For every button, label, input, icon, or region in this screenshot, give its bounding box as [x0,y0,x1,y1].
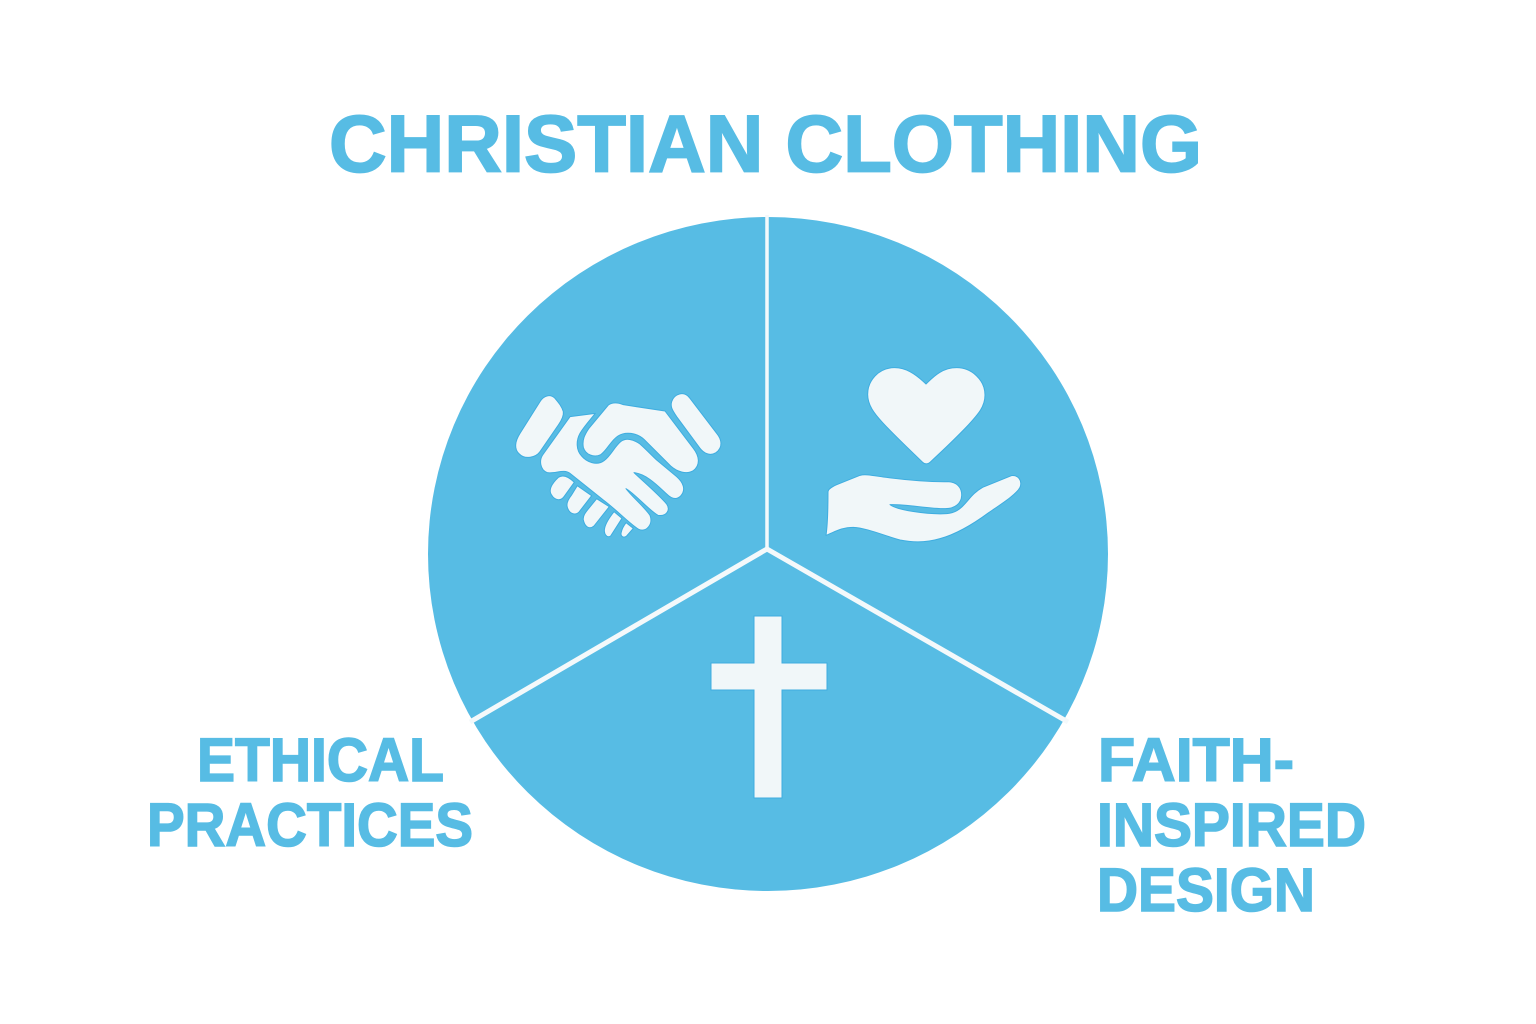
finger 2 [567,486,592,514]
finger 1 [550,476,574,500]
line: INSPIRED: INSPIRED [1097,791,1366,859]
divider: lower right [767,549,1068,722]
pie circle [428,217,1108,891]
right hand [583,403,698,473]
heart [868,368,985,464]
finger 4 [604,512,622,537]
finger 3 [583,499,609,528]
right cuff [671,394,721,454]
icon: heart in open hand [826,368,1021,542]
left cuff [516,396,563,457]
divider: vertical [765,215,769,549]
open hand [826,475,1021,542]
label: faith-inspired design [1097,726,1366,924]
label: ethical practices [147,726,473,859]
title: CHRISTIAN CLOTHING [329,100,1202,190]
divider: lower left [470,549,767,722]
line: FAITH-: FAITH- [1098,726,1294,794]
icon: cross [711,616,827,798]
pie chart: three pillars [428,215,1108,891]
line: PRACTICES: PRACTICES [147,791,473,859]
finger 5 [621,523,633,537]
icon: handshake [516,394,721,537]
left hand [541,413,684,530]
line: ETHICAL: ETHICAL [197,726,444,794]
line: DESIGN: DESIGN [1097,856,1315,924]
